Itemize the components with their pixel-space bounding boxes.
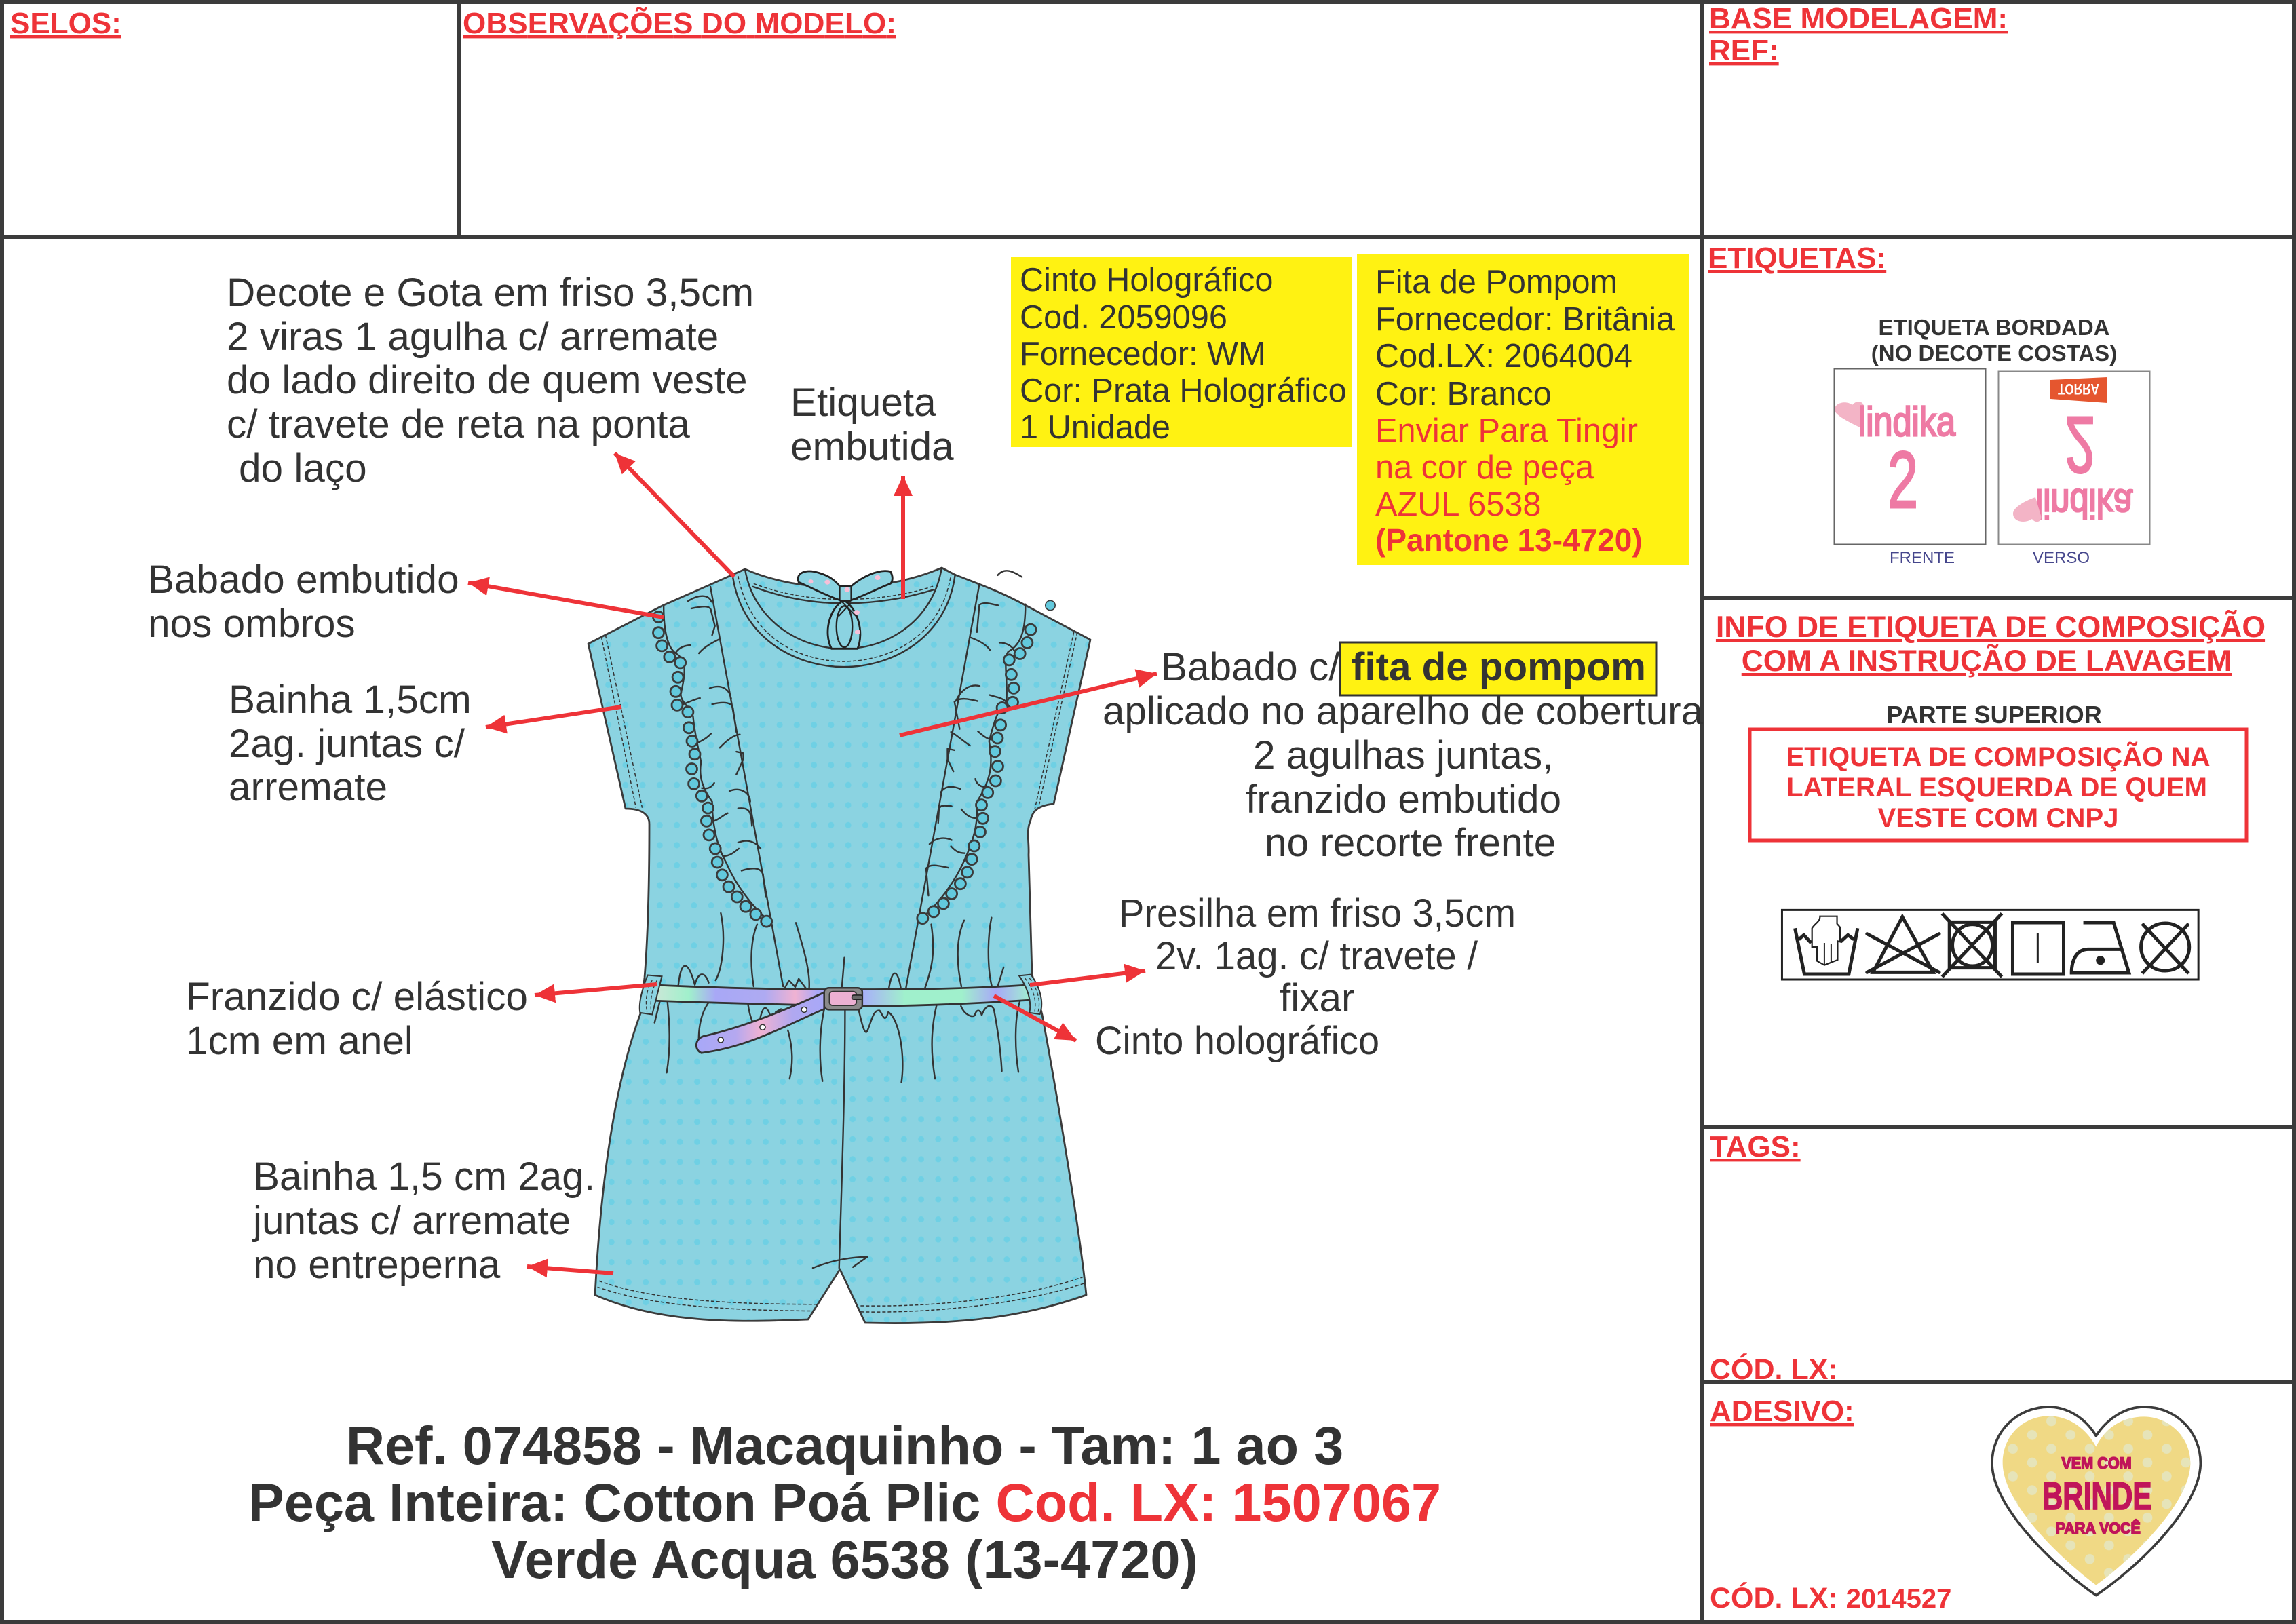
woven label: back: 2	[2065, 400, 2095, 489]
belt strap tail with holes	[696, 992, 824, 1053]
annotation: presilha: Presilha em friso 3,5cm	[1119, 891, 1516, 935]
callout: fita de pompom supplier: (Pantone 13-4720)	[1375, 522, 1643, 558]
heading: etiquetas: ETIQUETAS:	[1708, 241, 1886, 275]
annotation: bainha perna	[252, 1155, 595, 1287]
heading: observações do modelo: OBSERVAÇÕES DO MODELO:	[463, 6, 896, 40]
woven label: back	[1999, 372, 2149, 544]
garment body	[588, 568, 1090, 1323]
collar and neckline	[733, 568, 955, 667]
icon: iron low	[2071, 923, 2129, 973]
callout: fita de pompom supplier: AZUL 6538	[1375, 486, 1541, 523]
annotation: etiqueta embutida: Etiqueta	[790, 381, 936, 425]
icon: brinde heart sticker: BRINDE	[2042, 1475, 2151, 1518]
annotation: decote e gota: Decote e Gota em friso 3,5cm	[227, 271, 754, 315]
annotation: franzido com elástico	[186, 975, 528, 1063]
annotation: babado embutido	[148, 558, 459, 646]
ruffle edges and gathers	[664, 596, 1025, 920]
callout: composition label position: ETIQUETA DE COMPOSIÇÃO NA	[1786, 741, 2211, 772]
callout: cinto holográfico supplier: Cor: Prata Holográfico	[1020, 372, 1347, 409]
woven label: front: 2	[1888, 436, 1918, 525]
arrow: bainha manga	[486, 707, 621, 727]
caption: verso: VERSO	[2033, 549, 2090, 567]
arrow: babado embutido	[468, 583, 664, 617]
annotation: presilha: 2v. 1ag. c/ travete /	[1155, 934, 1478, 978]
bow at back neck	[798, 571, 892, 649]
annotation: presilha: fixar	[1280, 976, 1355, 1020]
subheading: parte superior: PARTE SUPERIOR	[1886, 701, 2102, 729]
caption: frente: FRENTE	[1890, 549, 1955, 567]
front panel seams	[710, 584, 979, 988]
annotation: babado fita de pompom: Babado c/	[1161, 645, 1340, 689]
annotation: decote e gota	[227, 271, 754, 490]
lower garment details: belt, loops, gathers, hem	[598, 975, 1085, 1312]
heading: tags: TAGS:	[1710, 1130, 1801, 1163]
stray pompom and arc	[998, 571, 1022, 577]
belt band	[651, 985, 1030, 1006]
arrow: bainha entreperna	[527, 1267, 613, 1273]
annotation: babado fita de pompom: fita de pompom	[1352, 645, 1646, 689]
callout: cinto holográfico supplier: 1 Unidade	[1020, 409, 1170, 446]
arrow: decote	[615, 453, 734, 577]
annotation: bainha perna: juntas c/ arremate	[252, 1199, 571, 1243]
icon: line dry	[2012, 923, 2064, 974]
annotation: franzido com elástico: 1cm em anel	[186, 1019, 413, 1063]
callout: composition label position	[1750, 729, 2246, 840]
annotation: babado fita de pompom: no recorte frente	[1265, 821, 1556, 865]
annotation: bainha perna: no entreperna	[253, 1243, 501, 1287]
belt loop right	[1019, 975, 1041, 1014]
annotation: presilha	[1119, 891, 1516, 1020]
leg hem stitches	[598, 1277, 1085, 1312]
arrow: franzido	[535, 984, 657, 995]
woven label: back: TORRA	[2058, 381, 2099, 398]
callout: fita de pompom supplier: na cor de peça	[1375, 449, 1594, 486]
heading: base modelagem: BASE MODELAGEM:	[1709, 2, 2008, 35]
callout: composition label position: VESTE COM CNPJ	[1877, 803, 2119, 833]
pompom trim	[653, 600, 1055, 927]
arrow: cinto	[994, 996, 1076, 1041]
callout: fita de pompom supplier: Cor: Branco	[1375, 376, 1552, 412]
belt buckle	[824, 988, 862, 1009]
annotation: decote e gota: do laço	[239, 446, 367, 490]
title block: Verde Acqua 6538 (13-4720)	[491, 1529, 1198, 1589]
garment illustration: romper	[588, 567, 1091, 1324]
arrow: etiqueta embutida	[901, 476, 905, 599]
icon: hand wash	[1795, 916, 1858, 974]
callout: cinto holográfico supplier: Cinto Holográfico	[1020, 262, 1273, 298]
panel: adesivo	[1702, 1382, 2294, 1622]
annotation: babado fita de pompom: franzido embutido	[1246, 777, 1561, 821]
woven label: front: lindika	[1858, 399, 1956, 444]
annotation: etiqueta embutida	[790, 381, 954, 469]
panel: info de etiqueta de composição	[1702, 598, 2294, 1127]
arrow: babado fita de pompom	[900, 674, 1157, 735]
annotation: decote e gota: do lado direito de quem veste	[227, 358, 748, 402]
heading: info line 2: COM A INSTRUÇÃO DE LAVAGEM	[1742, 644, 2232, 678]
annotation: bainha manga: 2ag. juntas c/	[229, 722, 465, 766]
label subtitle: (NO DECOTE COSTAS)	[1871, 341, 2117, 366]
heading: info line 1: INFO DE ETIQUETA DE COMPOSIÇÃO	[1716, 610, 2265, 644]
annotation: bainha manga: Bainha 1,5cm	[229, 678, 472, 722]
annotation: babado fita de pompom: aplicado no aparelho de cobertura	[1103, 689, 1703, 733]
belt loop left	[640, 975, 662, 1015]
annotation: decote e gota: c/ travete de reta na ponta	[227, 402, 690, 446]
panel: tags	[1702, 1127, 2294, 1386]
heading: ref: REF:	[1709, 34, 1779, 67]
title block: Peça Inteira: Cotton Poá Plic Cod. LX: 1507067	[248, 1472, 1441, 1532]
icon: brinde heart sticker: PARA VOCÊ	[2056, 1519, 2141, 1537]
annotation: cinto holográfico: Cinto holográfico	[1095, 1019, 1379, 1063]
annotation: etiqueta embutida: embutida	[790, 425, 954, 469]
icons: washing care symbols	[1782, 910, 2198, 980]
annotation: bainha manga	[229, 678, 472, 809]
panel: etiquetas	[1702, 237, 2294, 598]
sleeve hem stitches	[601, 632, 1077, 809]
annotation: bainha perna: Bainha 1,5 cm 2ag.	[253, 1155, 595, 1199]
icon: do not bleach	[1867, 917, 1939, 972]
arrow: presilha	[1030, 971, 1145, 985]
polka dot print	[543, 543, 1179, 1357]
panel: selos	[2, 2, 459, 237]
callout: fita de pompom supplier	[1357, 254, 1689, 565]
title block	[248, 1415, 1441, 1589]
annotation: babado fita de pompom	[1103, 642, 1703, 865]
heading: selos: SELOS:	[10, 7, 121, 40]
annotation: bainha manga: arremate	[229, 765, 387, 809]
callout: cinto holográfico supplier: Cod. 2059096	[1020, 299, 1227, 336]
panel: base modelagem	[1702, 2, 2294, 237]
heading: cód lx tags: CÓD. LX:	[1710, 1353, 1838, 1386]
annotation: babado embutido: Babado embutido	[148, 558, 459, 602]
woven label: back: lindika	[2035, 481, 2133, 526]
label title: etiqueta bordada: ETIQUETA BORDADA	[1878, 315, 2110, 340]
title block: Ref. 074858 - Macaquinho - Tam: 1 ao 3	[346, 1415, 1343, 1475]
upper garment details: collar, seams, ruffles	[601, 568, 1077, 990]
icon: do not dry clean	[2141, 923, 2189, 973]
annotation: babado embutido: nos ombros	[148, 602, 356, 646]
callout: composition label position: LATERAL ESQUERDA DE QUEM	[1786, 772, 2207, 803]
callout: fita de pompom supplier: Fita de Pompom	[1375, 264, 1618, 301]
callout: cinto holográfico supplier: Fornecedor: WM	[1020, 336, 1266, 372]
waist gathers	[678, 913, 1003, 990]
icon: brinde heart sticker	[1992, 1407, 2200, 1596]
callout: fita de pompom supplier: Cod.LX: 2064004	[1375, 338, 1632, 374]
callout: fita de pompom supplier: Fornecedor: Britânia	[1375, 301, 1675, 338]
lower gathers, center seam, crotch tack	[655, 1001, 1020, 1268]
callout: cinto holográfico supplier	[1011, 257, 1352, 447]
annotation: babado fita de pompom: 2 agulhas juntas,	[1253, 733, 1553, 777]
heading: adesivo: ADESIVO:	[1710, 1395, 1854, 1428]
text: cód lx adesivo: CÓD. LX: 2014527	[1710, 1581, 1951, 1615]
annotation: decote e gota: 2 viras 1 agulha c/ arremate	[227, 315, 719, 359]
icon: do not tumble dry	[1942, 914, 2002, 977]
callout: fita de pompom supplier: Enviar Para Tingir	[1375, 412, 1638, 449]
panel: main garment area	[2, 237, 1702, 1622]
woven label: front	[1835, 369, 1985, 544]
panel: observações do modelo	[459, 2, 1702, 237]
icon: brinde heart sticker: VEM COM	[2061, 1454, 2132, 1473]
annotation: franzido com elástico: Franzido c/ elástico	[186, 975, 528, 1019]
